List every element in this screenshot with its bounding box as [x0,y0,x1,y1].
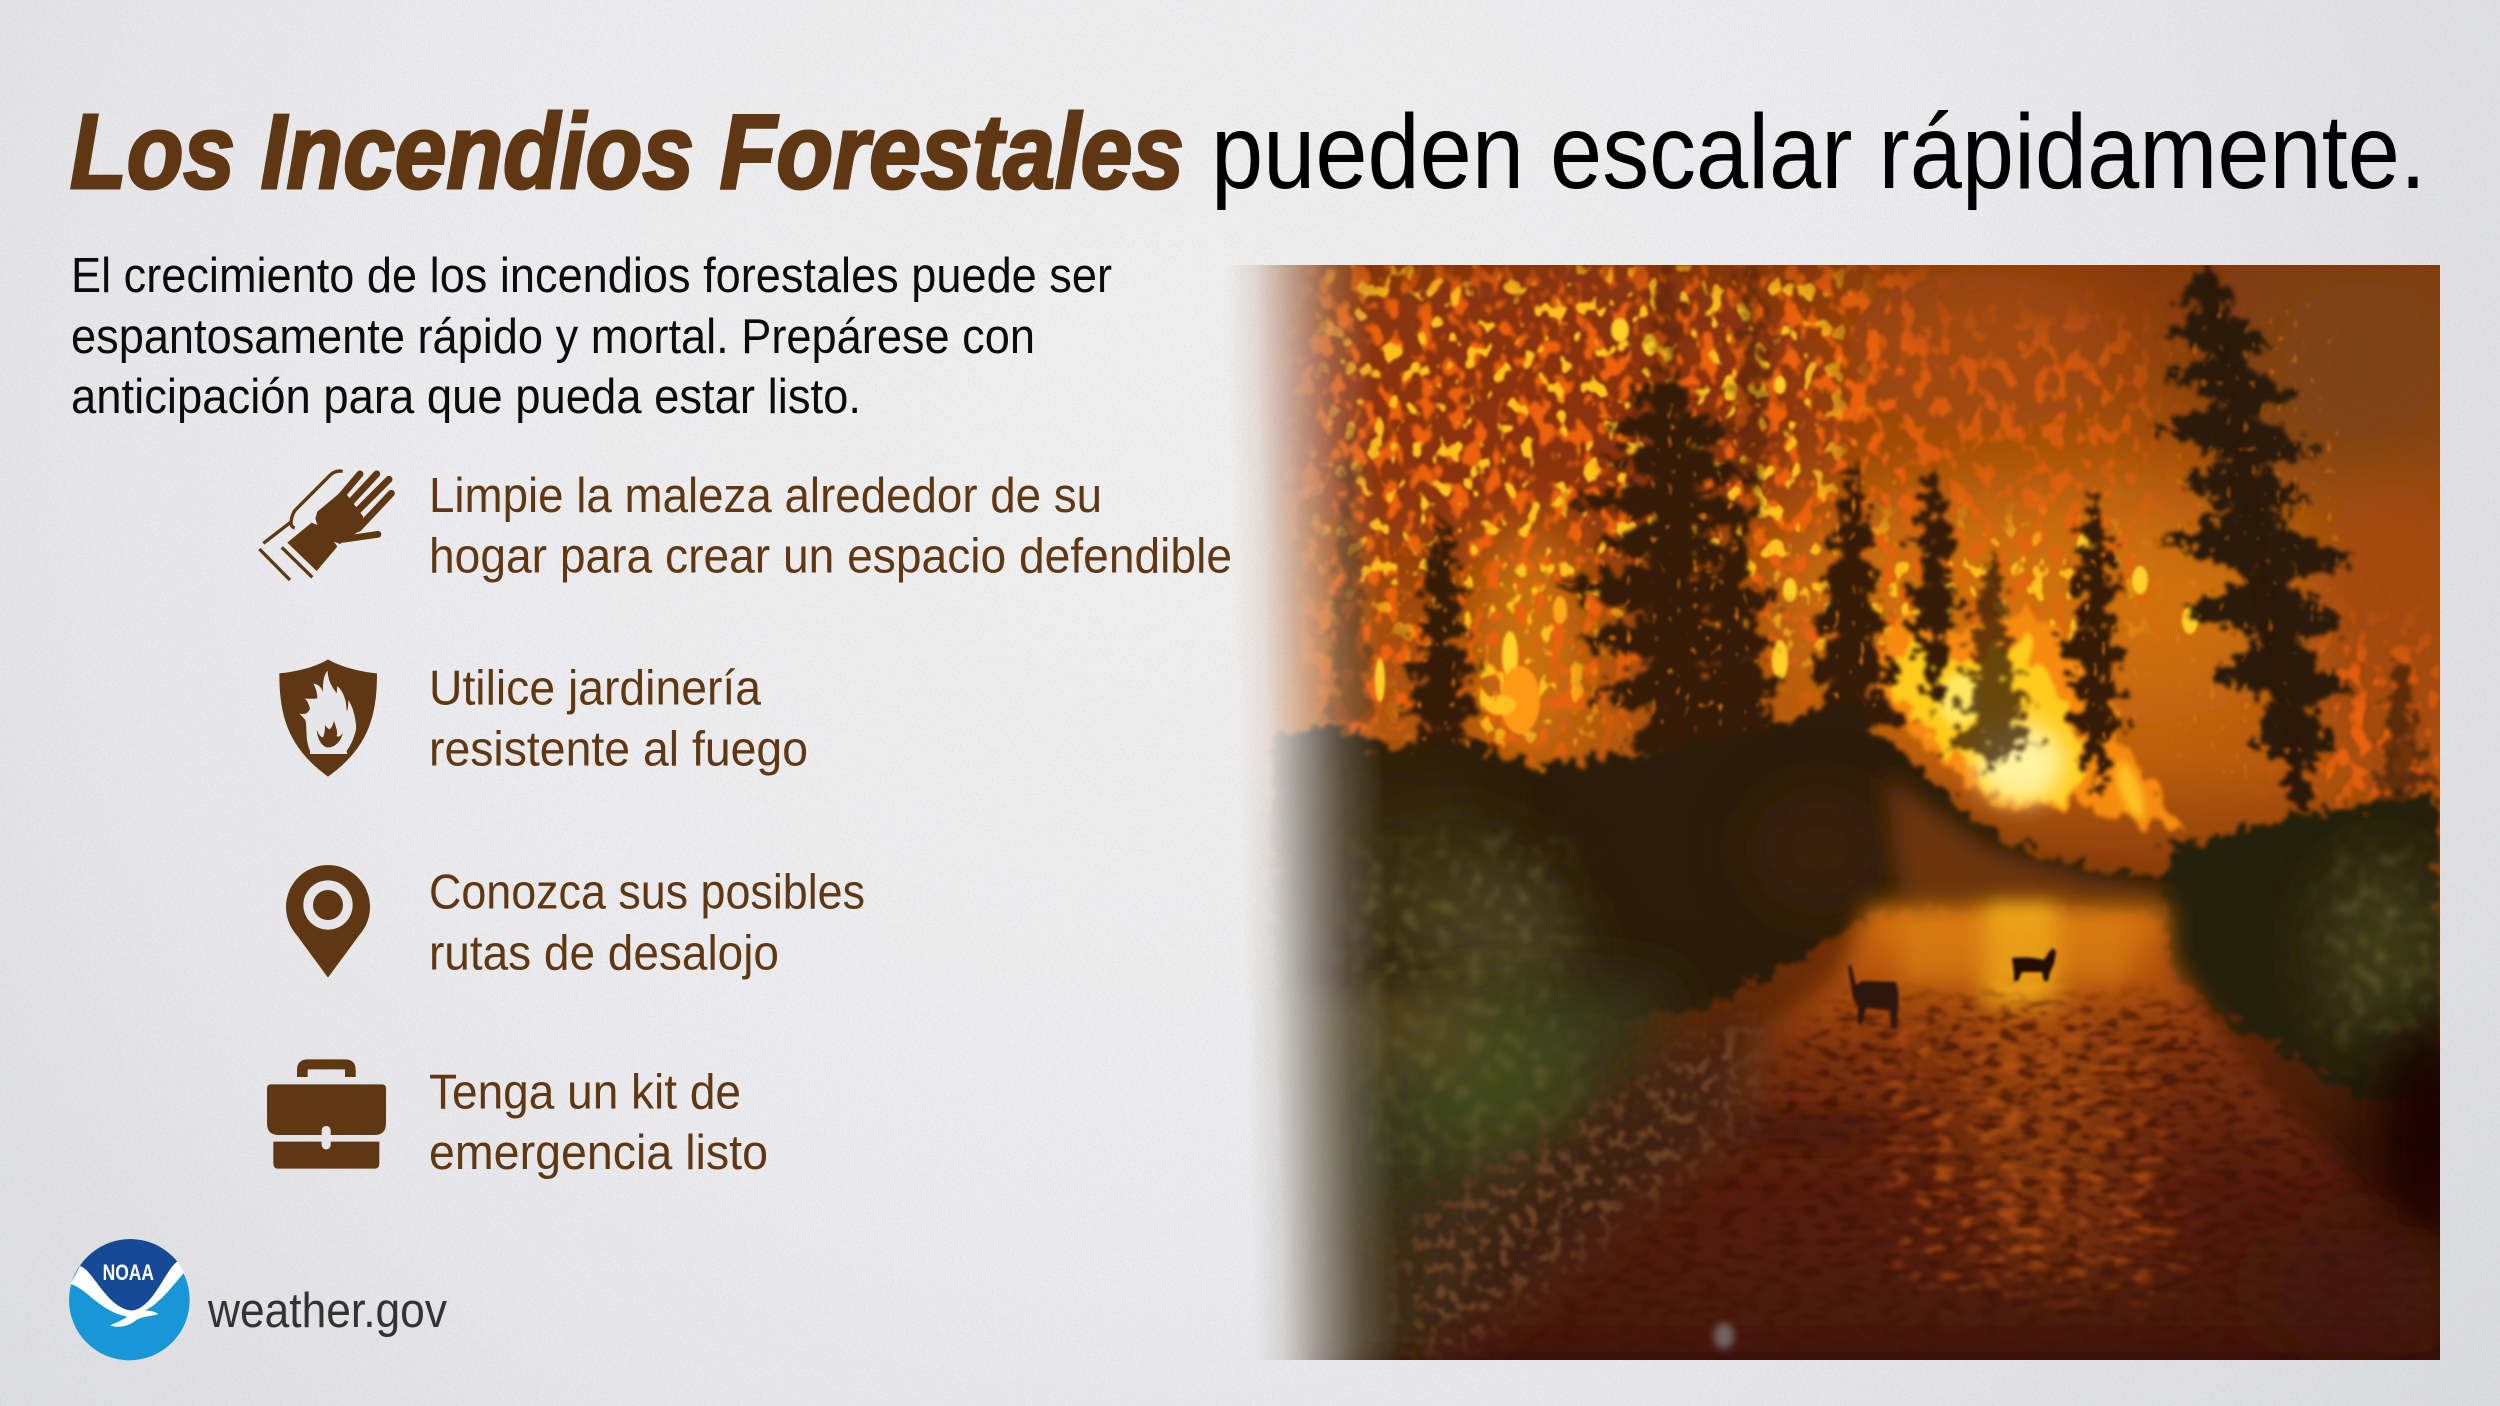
icon: glove [259,471,391,580]
title: Los Incendios Forestales [70,93,1184,211]
tip 3: evacuation routes [286,865,865,980]
lens flare speck [1714,1323,1734,1349]
intro paragraph: espantosamente rápido y mortal. Prepárese con [71,310,1035,364]
text: tip 2 [429,662,808,776]
left bank bushes and grass [1240,830,2430,1360]
hillside glow under fire [1885,775,2170,905]
main fire core [1870,610,2185,835]
photo: forest fire with deer in river [1200,230,2480,1360]
river [1400,905,2480,1360]
text: tip 4 [429,1066,768,1180]
flame streaks [1375,318,2198,734]
conifer silhouettes [1320,265,2440,830]
intro paragraph: El crecimiento de los incendios forestales puede ser [71,249,1112,303]
gravel bar [1400,1000,1760,1350]
NOAA logo [69,1239,190,1360]
tip 4: emergency kit [267,1059,768,1180]
icon: briefcase [267,1059,386,1169]
right bank foliage [2165,795,2440,1130]
text: tip 1 [429,469,1232,584]
burning canopy sparks [1310,265,2440,810]
tips list [259,469,1232,1180]
icon: map pin [286,865,370,978]
text: tip 4: emergencia listo [429,1126,768,1180]
tip 2: fire-resistant landscaping [279,659,808,777]
sparks through foliage [1390,300,2340,780]
intro paragraph [71,249,1112,424]
text: tip 4: Tenga un kit de [429,1066,741,1120]
deer, left [1848,965,1899,1028]
tip 1: clear brush [259,469,1232,584]
website: weather.gov: weather.gov [207,1284,447,1338]
text: tip 3: Conozca sus posibles [429,866,865,920]
fire-lit sky [1200,230,2480,1360]
text: tip 1: Limpie la maleza alrededor de su [429,469,1102,523]
NOAA logo: NOAA [103,1260,154,1285]
title [70,93,2426,211]
text: tip 3: rutas de desalojo [429,926,779,980]
deer, right [2012,948,2056,981]
intro paragraph: anticipación para que pueda estar listo. [71,370,861,424]
text: tip 1: hogar para crear un espacio defendible [429,530,1232,584]
dark forest mass [1270,700,2175,1030]
text: tip 3 [429,866,865,980]
text: tip 2: Utilice jardinería [429,662,762,716]
text: tip 2: resistente al fuego [429,722,808,776]
icon: shield with flame [279,659,377,777]
